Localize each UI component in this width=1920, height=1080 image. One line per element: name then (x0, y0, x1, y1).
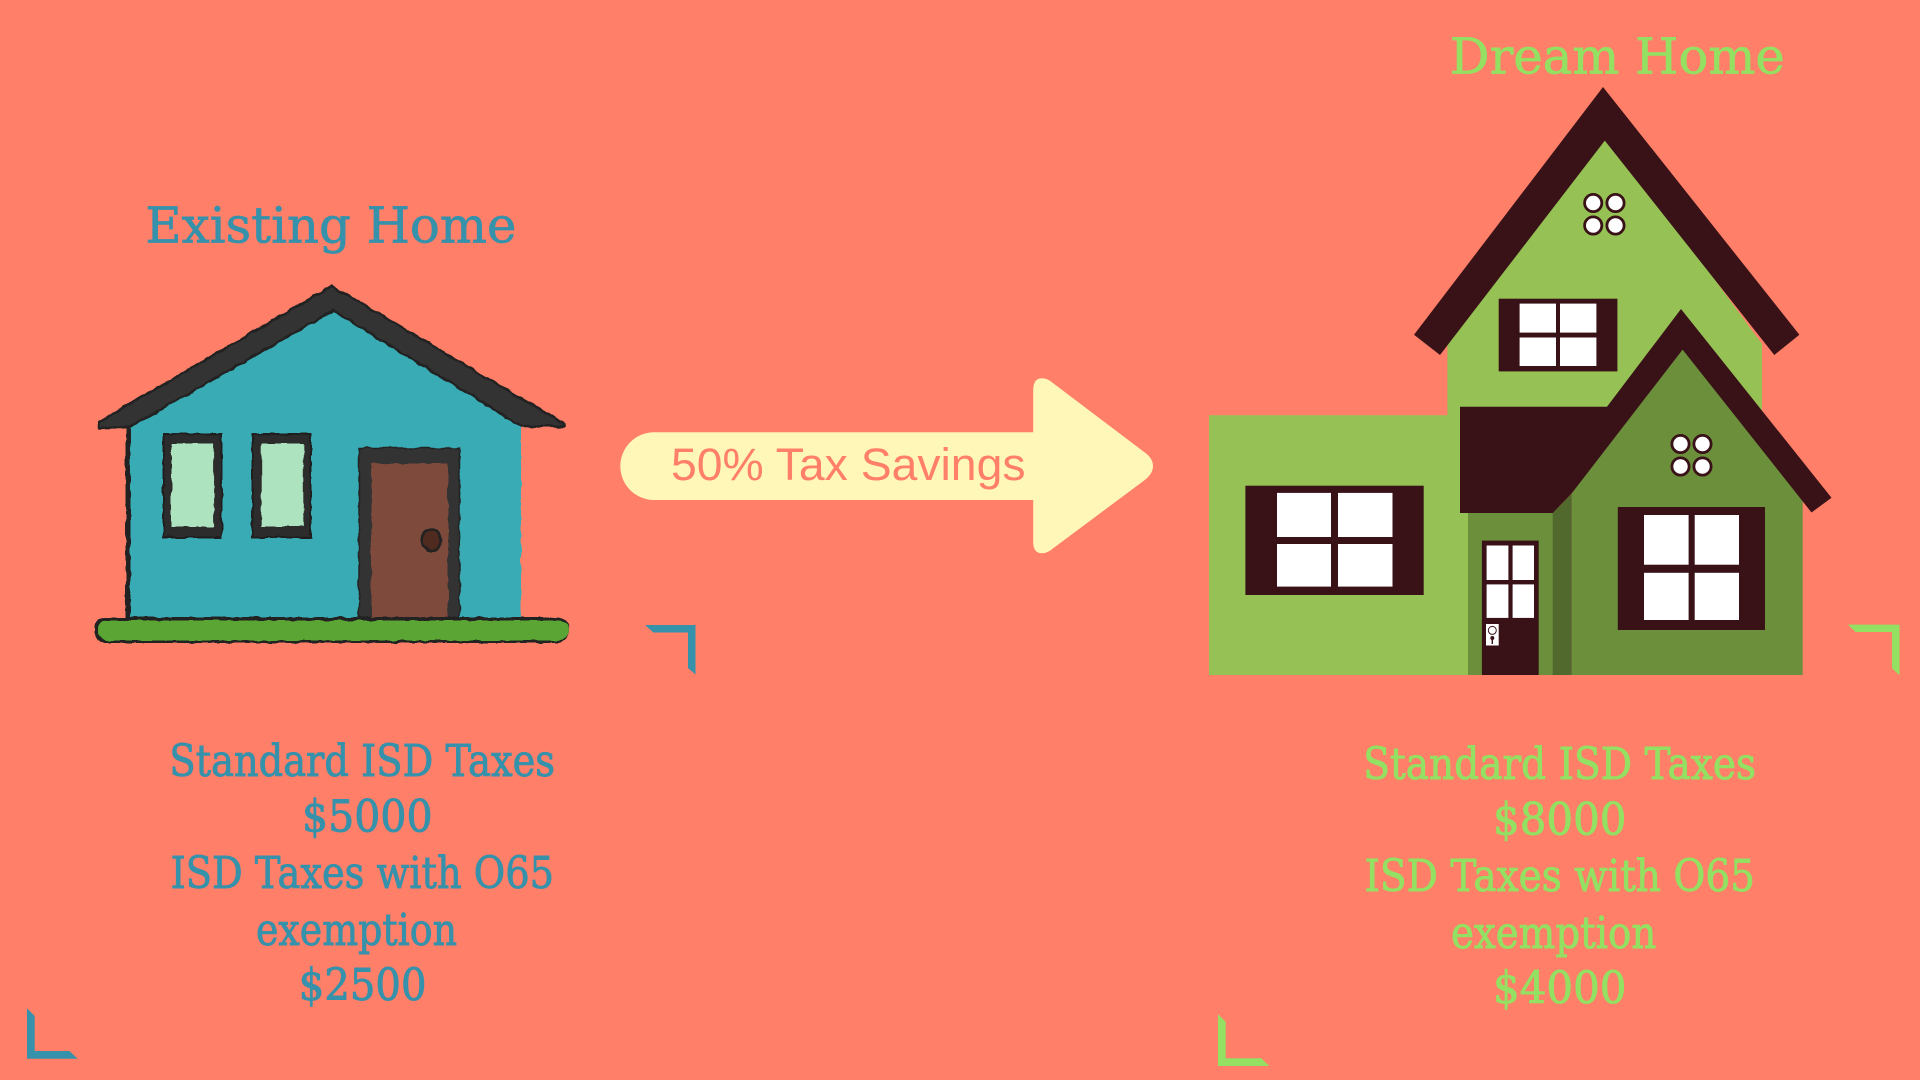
text block: dream home taxes (1363, 739, 1756, 1014)
left window (1245, 486, 1424, 595)
front door (1482, 541, 1539, 675)
left window (164, 434, 222, 538)
text block: dream home taxes: $8000 (1493, 794, 1626, 846)
lower attic windows (1672, 435, 1711, 475)
text block: existing home taxes: $2500 (299, 960, 426, 1011)
text block: existing home taxes: $5000 (302, 792, 433, 842)
right window (1618, 507, 1765, 630)
corner bracket: existing home top right (645, 625, 696, 674)
text block: dream home taxes: $4000 (1493, 963, 1626, 1014)
corner bracket: dream home top right (1848, 625, 1900, 675)
door (359, 448, 460, 617)
heading: Dream Home: Dream Home (1450, 28, 1785, 86)
text block: dream home taxes: exemption (1451, 908, 1656, 959)
upper attic windows (1585, 194, 1624, 234)
left wing wall (1209, 415, 1469, 675)
text block: existing home taxes: ISD Taxes with O65 (171, 848, 554, 899)
text block: existing home taxes: exemption (256, 905, 457, 956)
house wall (130, 306, 521, 617)
upper roof (1414, 87, 1799, 355)
illustration: existing home (94, 286, 568, 643)
arrow: 50% tax savings: 50% Tax Savings (671, 439, 1026, 490)
middle window (252, 434, 310, 538)
corner bracket: dream home bottom left (1218, 1014, 1269, 1066)
upper storey wall (1447, 130, 1762, 420)
heading: Existing Home: Existing Home (145, 196, 516, 254)
porch wall (1468, 505, 1558, 675)
corner bracket: existing home bottom left (27, 1008, 78, 1059)
text block: existing home taxes (169, 736, 555, 1011)
text block: dream home taxes: Standard ISD Taxes (1363, 739, 1756, 790)
lower roof (1460, 309, 1832, 513)
arrow: 50% tax savings (620, 378, 1153, 553)
text block: existing home taxes: Standard ISD Taxes (169, 736, 555, 787)
text block: dream home taxes: ISD Taxes with O65 (1364, 851, 1755, 902)
roof (99, 286, 564, 428)
upper window (1499, 299, 1617, 371)
ground (94, 617, 568, 643)
porch shadow strip (1553, 493, 1572, 675)
left wall edge (126, 425, 130, 618)
right gable wall (1572, 340, 1803, 675)
illustration: dream home (1209, 87, 1832, 675)
